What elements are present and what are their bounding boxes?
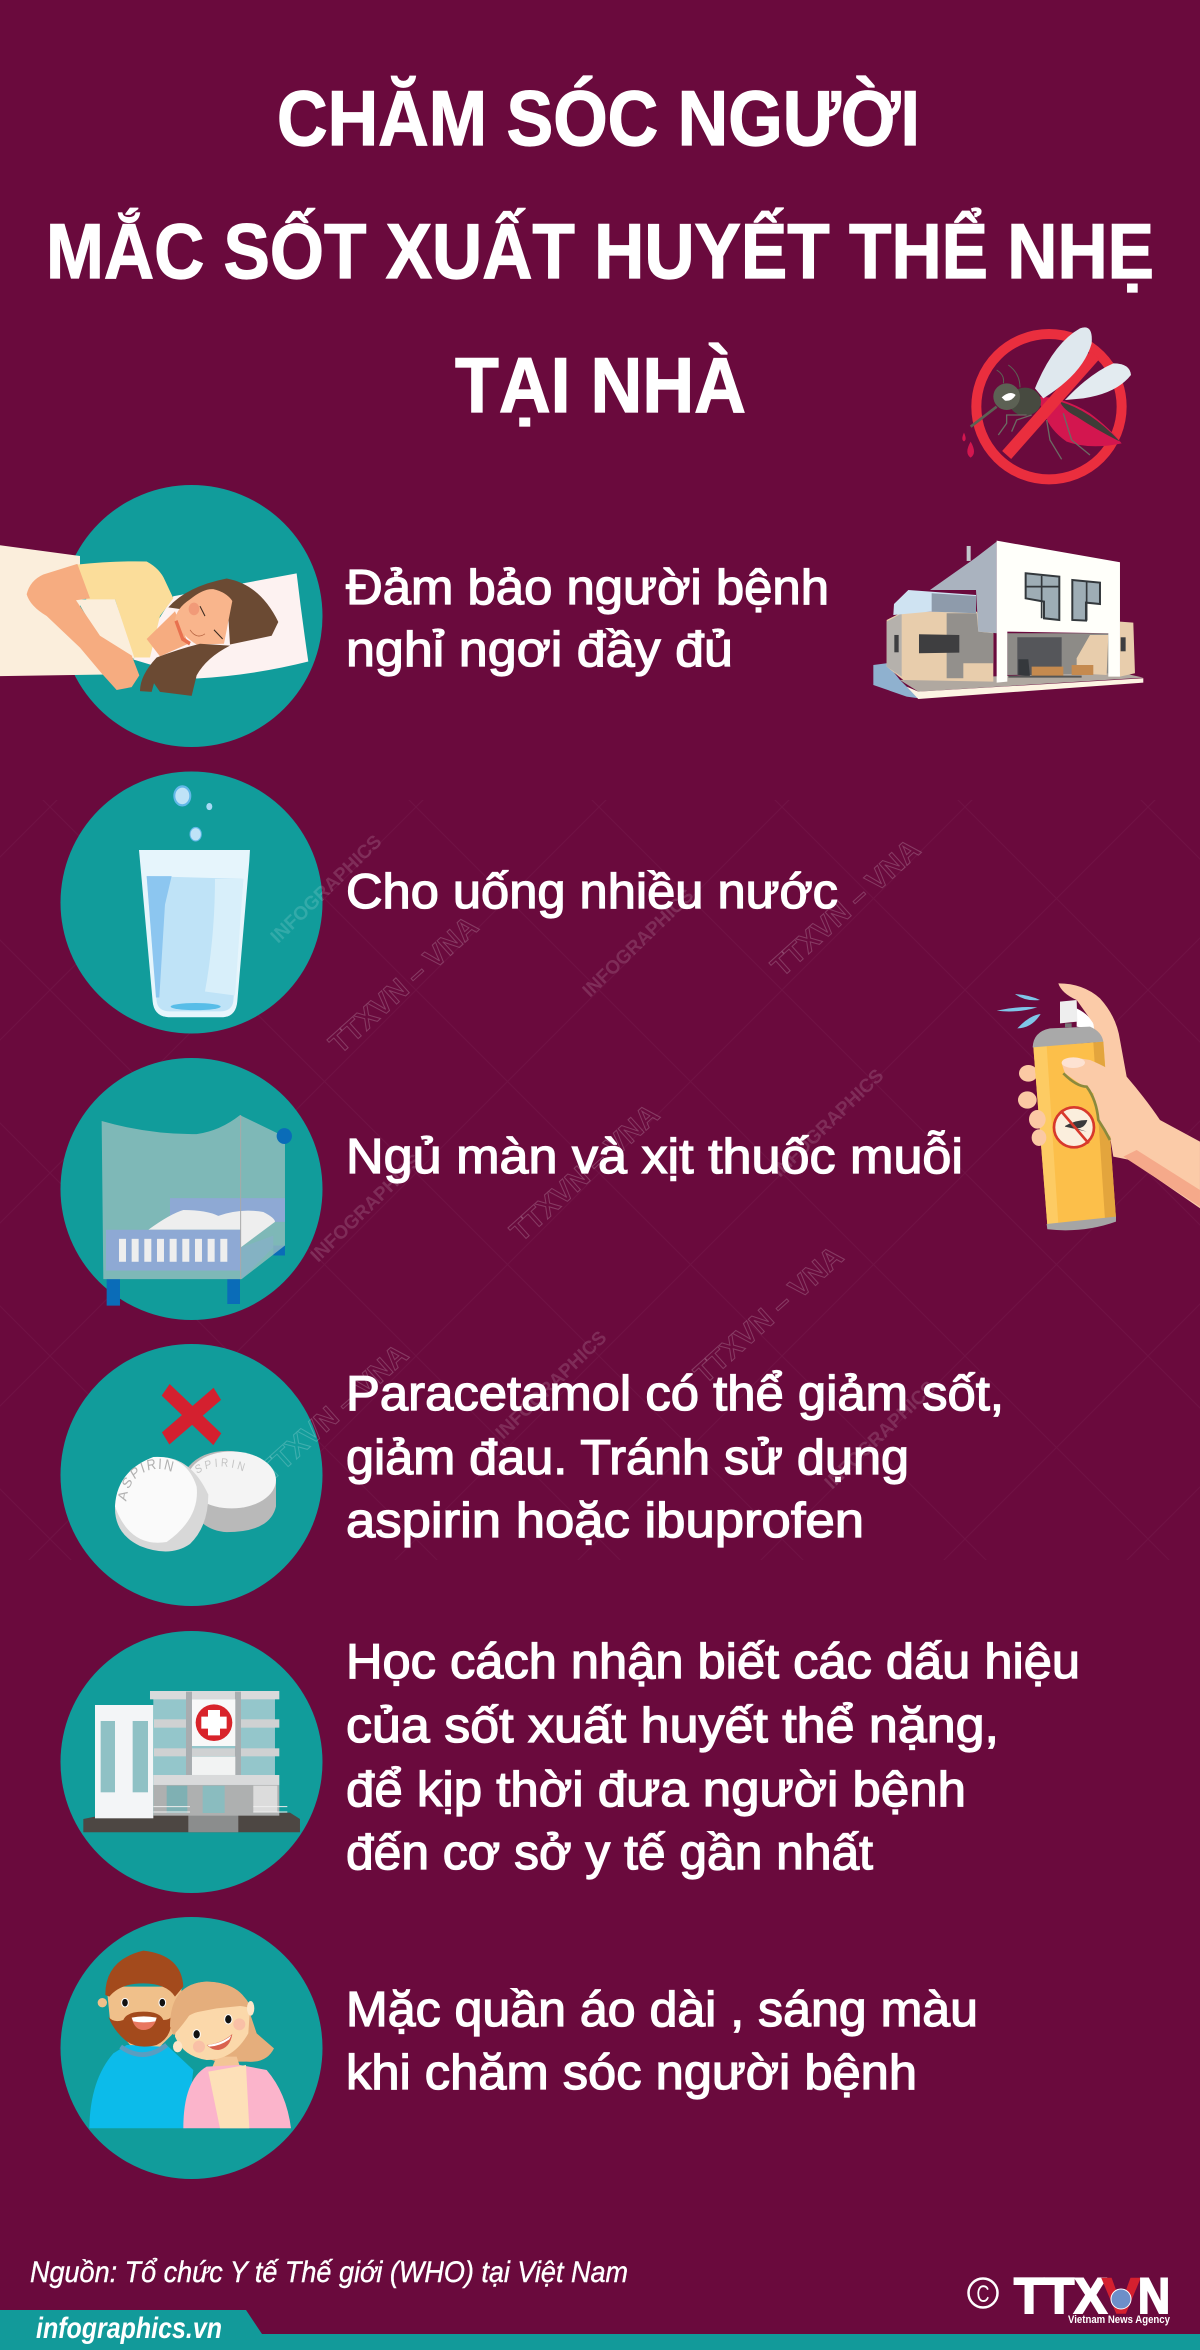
icon: couple xyxy=(89,1951,291,2128)
text: step 1 xyxy=(346,561,829,677)
title: CHĂM SÓC NGƯỜI xyxy=(277,74,920,162)
text: step 5 xyxy=(346,1635,1080,1880)
icon: hospital xyxy=(83,1691,300,1832)
text: step 5: đến cơ sở y tế gần nhất xyxy=(346,1826,873,1880)
step 6 circle xyxy=(60,1917,322,2179)
title: TẠI NHÀ xyxy=(455,341,746,429)
step 4 circle xyxy=(60,1344,322,1606)
text: step 6: Mặc quần áo dài , sáng màu xyxy=(346,1983,978,2037)
logo: TTXVN: TTX xyxy=(1014,2268,1107,2324)
step 3 circle xyxy=(60,1058,322,1320)
text: step 6 xyxy=(346,1983,978,2100)
text: step 1: nghỉ ngơi đầy đủ xyxy=(346,623,733,677)
text: step 3: Ngủ màn và xịt thuốc muỗi xyxy=(346,1130,963,1184)
step 2 circle xyxy=(60,772,322,1034)
footer site name: infographics.vn xyxy=(36,2312,222,2345)
watermark: INFOGRAPHICS xyxy=(492,1327,611,1444)
copyright mark xyxy=(968,2278,998,2308)
text: step 4: Paracetamol có thể giảm sốt, xyxy=(346,1367,1004,1421)
icon: aspirin tablets xyxy=(115,1384,276,1552)
icon: no mosquito xyxy=(962,327,1131,479)
text: step 1: Đảm bảo người bệnh xyxy=(346,561,829,615)
footer band xyxy=(0,2310,1200,2350)
step 5 circle xyxy=(60,1631,322,1893)
watermark: INFOGRAPHICS xyxy=(769,1065,888,1182)
watermark: TTXVN – VNA xyxy=(323,910,485,1060)
title xyxy=(46,74,1154,429)
panel: care steps xyxy=(60,485,322,2179)
logo: TTXVN: N xyxy=(1138,2268,1170,2324)
text: step 5: để kịp thời đưa người bệnh xyxy=(346,1763,966,1817)
text: step 5: Học cách nhận biết các dấu hiệu xyxy=(346,1635,1080,1689)
watermark: TTXVN – VNA xyxy=(253,1338,415,1488)
text: step 4: aspirin hoặc ibuprofen xyxy=(346,1494,864,1548)
text: step 2: Cho uống nhiều nước xyxy=(346,865,838,919)
icon: bed with mosquito net xyxy=(102,1115,292,1306)
icon: aspirin tablets: ASPIRIN xyxy=(118,1458,174,1502)
icon: aspirin tablets: SPIRIN xyxy=(195,1458,245,1473)
source note: Nguồn: Tổ chức Y tế Thế giới (WHO) tại Việt Nam xyxy=(30,2256,628,2289)
icon: sleeping patient xyxy=(0,545,308,696)
text: step 4 xyxy=(346,1367,1004,1548)
copyright mark: C xyxy=(976,2281,990,2308)
watermark: INFOGRAPHICS xyxy=(267,831,386,948)
watermark: INFOGRAPHICS xyxy=(307,1150,426,1267)
watermark: TTXVN – VNA xyxy=(688,1240,850,1390)
icon: spray can xyxy=(997,983,1200,1230)
watermark: INFOGRAPHICS xyxy=(821,1377,940,1494)
watermark xyxy=(253,831,940,1494)
logo: TTXVN xyxy=(1014,2268,1171,2326)
icon: house xyxy=(873,541,1143,699)
text: step 4: giảm đau. Tránh sử dụng xyxy=(346,1431,909,1485)
logo: TTXVN: Vietnam News Agency xyxy=(1068,2314,1171,2326)
watermark: TTXVN – VNA xyxy=(504,1098,666,1248)
step 1 circle xyxy=(60,485,322,747)
text: step 5: của sốt xuất huyết thể nặng, xyxy=(346,1699,999,1753)
text: step 6: khi chăm sóc người bệnh xyxy=(346,2046,917,2100)
watermark: INFOGRAPHICS xyxy=(579,885,698,1002)
icon: glass of water xyxy=(139,786,250,1017)
watermark: TTXVN – VNA xyxy=(765,833,927,983)
logo: TTXVN: V xyxy=(1102,2268,1141,2324)
